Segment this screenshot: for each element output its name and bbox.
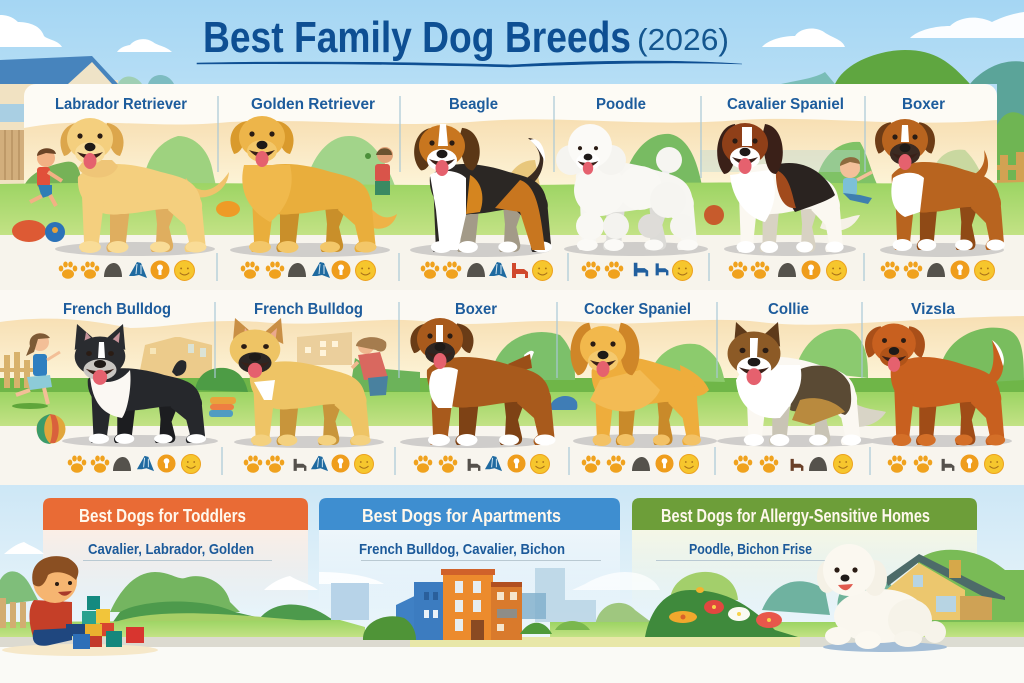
- breed labels row one: [55, 96, 945, 113]
- top clouds: [0, 12, 1024, 52]
- breed labels row one: Boxer: [902, 96, 945, 113]
- title: (2026): [637, 22, 729, 57]
- dog: Vizsla: [865, 323, 1005, 446]
- breed labels row two: Cocker Spaniel: [584, 301, 691, 318]
- breed labels row one: Cavalier Spaniel: [727, 96, 844, 113]
- bottom scene background: [0, 485, 1024, 683]
- breed labels row two: Boxer: [455, 301, 497, 318]
- dividers top row: [217, 96, 865, 281]
- grass top row: [0, 182, 1024, 235]
- dog: Boxer: [875, 119, 1005, 251]
- dog: Collie: [728, 322, 886, 446]
- icons: Collie: [734, 454, 852, 474]
- title underline: [197, 61, 742, 67]
- card: Best Dogs for Allergy-Sensitive Homes: Best Dogs for Allergy-Sensitive Homes: [661, 506, 930, 526]
- city skyline: [331, 568, 596, 622]
- fence left: [0, 130, 24, 180]
- dividers second row: [215, 302, 870, 475]
- card: Best Dogs for Toddlers: [43, 498, 308, 610]
- toys second row: [36, 396, 577, 444]
- child with blocks: [0, 556, 158, 656]
- dog: Bichon Frise: [817, 544, 947, 652]
- card: Best Dogs for Apartments: French Bulldog, Cavalier, Bichon: [359, 541, 565, 558]
- icons: Labrador: [59, 260, 194, 280]
- children top row: [30, 147, 872, 206]
- sky background: [0, 0, 1024, 290]
- breed labels row two: French Bulldog: [254, 301, 363, 318]
- icons: Vizsla: [888, 454, 1004, 474]
- breed labels row two: Vizsla: [911, 301, 955, 318]
- dog: Boxer second row: [410, 318, 556, 446]
- breed labels row one: Labrador Retriever: [55, 96, 187, 113]
- grass second row: [0, 392, 1024, 426]
- children second row: [12, 333, 388, 409]
- child running left: [30, 148, 62, 206]
- scene: house top left: [0, 56, 174, 190]
- buildings second row: [140, 332, 352, 378]
- breed labels row one: Beagle: [449, 96, 498, 113]
- bottom trees and grass: [0, 550, 1024, 637]
- icons: Cocker Spaniel: [582, 454, 698, 474]
- dog: Beagle: [414, 124, 552, 253]
- panel: top row of breeds: [0, 84, 1024, 290]
- title: Best Family Dog Breeds: [203, 13, 631, 62]
- icons: Golden: [241, 260, 375, 280]
- apartment buildings: [363, 569, 590, 640]
- house bottom right: [885, 554, 1005, 620]
- icons: French Bulldog black: [68, 454, 200, 474]
- girl running: [12, 333, 60, 409]
- dog: French Bulldog tan: [230, 318, 371, 446]
- dog: Cocker Spaniel: [571, 323, 709, 446]
- dog: Cavalier Spaniel: [717, 123, 860, 253]
- dog: Poodle: [556, 124, 698, 251]
- icons: Cavalier: [729, 260, 846, 280]
- card: Best Dogs for Toddlers: Best Dogs for Toddlers: [79, 506, 246, 526]
- icons: Poodle: [582, 261, 692, 280]
- strip below grass second row: [0, 426, 1024, 485]
- child sitting right: [840, 157, 872, 204]
- icons: Boxer: [881, 260, 994, 280]
- panel: second row of breeds: [0, 290, 1024, 485]
- breed labels row one: Poodle: [596, 96, 646, 113]
- dog shadows second row: [62, 434, 1012, 448]
- trees second row: [0, 328, 1024, 392]
- flower bush: [645, 572, 798, 637]
- breed labels row two: French Bulldog: [63, 301, 171, 318]
- toys top row: [12, 201, 724, 242]
- icons: Beagle: [421, 261, 552, 280]
- icons row two: [68, 454, 1003, 474]
- card: Best Dogs for Apartments: Best Dogs for Apartments: [362, 506, 561, 526]
- breed labels row one: Golden Retriever: [251, 96, 375, 113]
- dog shadows top row: [55, 242, 1004, 257]
- card: Best Dogs for Allergy-Sensitive Homes: Poodle, Bichon Frise: [689, 541, 812, 558]
- trees top row: [24, 134, 984, 186]
- icons: French Bulldog tan: [244, 454, 374, 474]
- dog: Labrador Retriever: [60, 118, 229, 253]
- dog: French Bulldog black: [75, 324, 206, 444]
- breed labels row two: [63, 301, 955, 318]
- fence right: [997, 152, 1024, 197]
- child with ball: [365, 147, 393, 195]
- card: Best Dogs for Allergy-Sensitive Homes: [632, 498, 977, 610]
- dog: Golden Retriever: [230, 116, 397, 253]
- icons row one: [59, 260, 994, 280]
- icons: Boxer second row: [414, 454, 550, 474]
- scene: right hill and trees: [781, 50, 1024, 240]
- card: Best Dogs for Apartments: [319, 498, 620, 610]
- card: Best Dogs for Toddlers: Cavalier, Labrador, Golden: [88, 541, 254, 558]
- fence second row: [0, 352, 35, 388]
- bottom clouds: [4, 542, 660, 590]
- breed labels row two: Collie: [768, 301, 809, 318]
- child right: [352, 337, 388, 396]
